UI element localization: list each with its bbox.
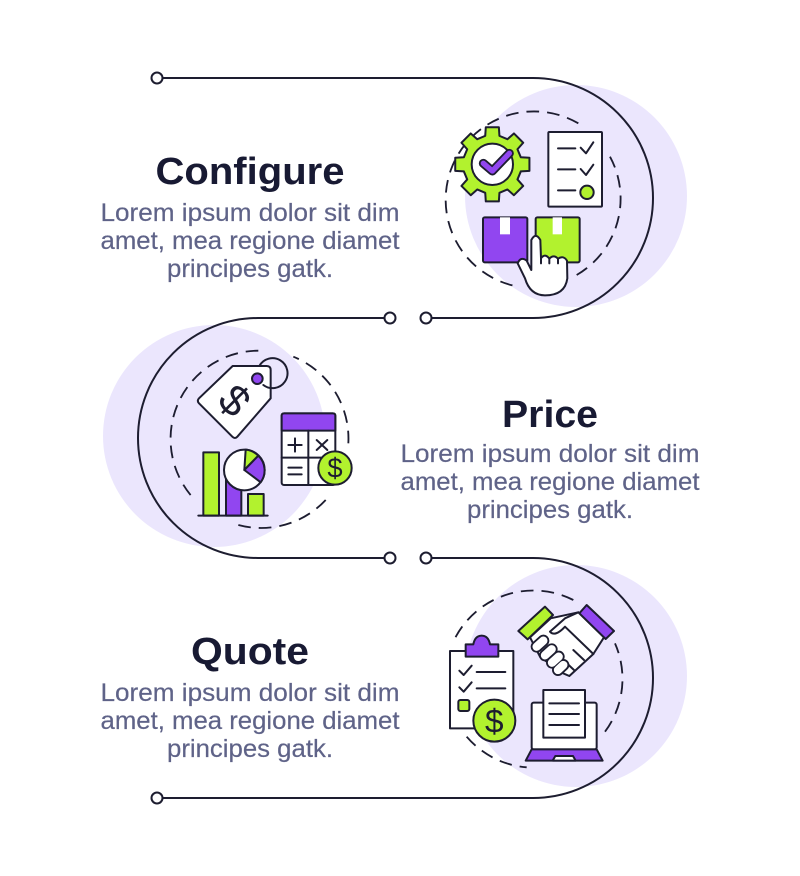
icon: calculator: [282, 413, 352, 485]
icon: purple box: [483, 217, 527, 262]
heading: configure: Configure: [156, 151, 344, 193]
description: quote: principes gatk.: [167, 735, 333, 763]
icon: price tag: $: [209, 375, 260, 426]
description: price: principes gatk.: [467, 496, 633, 524]
description: quote: [100, 679, 400, 763]
icon: price tag: [198, 358, 288, 438]
description: price: [400, 440, 700, 524]
description: price: amet, mea regione diamet: [400, 468, 700, 496]
icon group: quote: [450, 590, 622, 767]
text block: configure: [100, 151, 400, 283]
description: price: Lorem ipsum dolor sit dim: [400, 440, 700, 468]
icon: handshake: [518, 605, 614, 676]
chart: bars with pie: [198, 450, 268, 516]
panel: lavender circle quote: [465, 565, 687, 787]
description: quote: amet, mea regione diamet: [100, 707, 400, 735]
description: quote: Lorem ipsum dolor sit dim: [100, 679, 400, 707]
description: configure: principes gatk.: [167, 255, 333, 283]
icon: laptop with document: [526, 690, 603, 761]
icon: gear with check: [455, 127, 529, 201]
icon group: price: [171, 351, 352, 528]
connector line: configure: [152, 72, 653, 324]
icon: calculator: $: [327, 452, 343, 483]
dashed ring: [446, 111, 621, 287]
description: configure: [100, 199, 400, 283]
panel: lavender circle configure: [465, 85, 687, 307]
dashed ring: [171, 351, 348, 528]
icon: clipboard with dollar: [450, 636, 515, 742]
description: configure: Lorem ipsum dolor sit dim: [100, 199, 400, 227]
icon: clipboard with dollar: $: [485, 703, 504, 740]
text block: quote: [100, 631, 400, 763]
connector line: quote: [152, 552, 653, 804]
icon: green box: [536, 217, 580, 262]
icon group: configure: [446, 111, 621, 295]
icon: pointing hand: [518, 236, 567, 295]
icon: checklist: [548, 132, 602, 207]
dashed ring: [453, 590, 622, 767]
connector line: price: [138, 312, 396, 564]
text block: price: [400, 394, 700, 524]
heading: price: Price: [502, 394, 598, 436]
panel: lavender circle price: [103, 325, 325, 547]
description: configure: amet, mea regione diamet: [100, 227, 400, 255]
heading: quote: Quote: [191, 631, 309, 673]
